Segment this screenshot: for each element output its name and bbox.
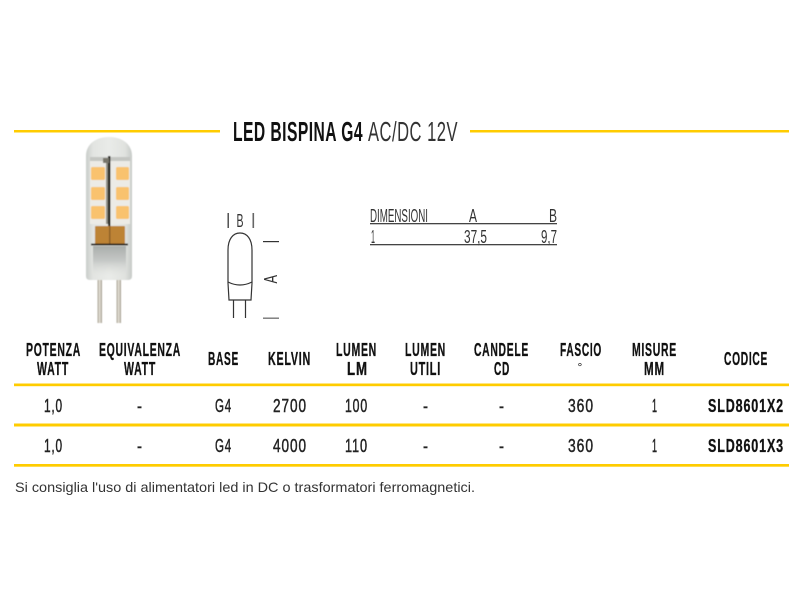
- footnote: Si consiglia l'uso di alimentatori led in DC o trasformatori ferromagnetici.: [15, 479, 475, 495]
- table row 1: 1: [652, 396, 657, 416]
- table header: BASE: [208, 349, 239, 369]
- icon: LED G4 bulb photo: [86, 137, 132, 323]
- table header: POTENZA: [26, 340, 81, 360]
- bulb body: [86, 137, 132, 280]
- table row 1: G4: [215, 396, 232, 416]
- dimensions table: DIMENSIONI: [370, 206, 428, 226]
- table header: LUMEN: [405, 340, 446, 360]
- dimensions table: 37,5: [464, 227, 487, 247]
- table header: WATT: [124, 359, 156, 379]
- dimensions table: B: [549, 206, 557, 226]
- table header: CD: [494, 359, 510, 379]
- table row 2: G4: [215, 436, 232, 456]
- table header: [26, 340, 768, 379]
- table row 1: 1,0: [44, 396, 63, 416]
- table header: FASCIO: [560, 340, 602, 360]
- bulb outline: [228, 233, 252, 318]
- table row 2: -: [137, 436, 142, 456]
- table header: MM: [644, 359, 665, 379]
- dimension A: A: [261, 275, 281, 284]
- bulb capacitor: [91, 226, 128, 246]
- table row 2: -: [499, 436, 504, 456]
- table header: LM: [347, 359, 368, 379]
- dimensions table: 9,7: [541, 227, 557, 247]
- table header: MISURE: [632, 340, 677, 360]
- title rule left: [14, 130, 220, 132]
- table header: UTILI: [410, 359, 441, 379]
- table row 1: -: [137, 396, 142, 416]
- table header: WATT: [37, 359, 69, 379]
- bulb LED chips: [91, 167, 129, 219]
- title: AC/DC 12V: [368, 116, 458, 147]
- table rule 1: [14, 384, 789, 386]
- table row 2: 1,0: [44, 436, 63, 456]
- bulb circuit board: [90, 156, 130, 226]
- table row 1: 100: [345, 396, 368, 416]
- table header: EQUIVALENZA: [99, 340, 181, 360]
- table row 2: 360: [568, 436, 594, 456]
- table header: CANDELE: [474, 340, 529, 360]
- table header: KELVIN: [268, 349, 311, 369]
- table rule 3: [14, 464, 789, 467]
- table row 1: 360: [568, 396, 594, 416]
- dimension drawing: [228, 211, 281, 319]
- table row 2: [44, 436, 784, 456]
- table row 1: -: [499, 396, 504, 416]
- table header: °: [578, 360, 582, 374]
- dimensions table: 1: [371, 227, 375, 247]
- table row 1: -: [423, 396, 428, 416]
- table row 2: 1: [652, 436, 657, 456]
- table rule 2: [14, 424, 789, 426]
- title: LED BISPINA G4: [233, 116, 363, 147]
- dimensions table: [370, 206, 557, 247]
- table row 2: -: [423, 436, 428, 456]
- table row 1: [44, 396, 784, 416]
- label B with ticks: B: [236, 211, 244, 231]
- table header: LUMEN: [336, 340, 377, 360]
- table row 2: 110: [345, 436, 368, 456]
- title rule right: [470, 130, 789, 132]
- table row 2: 4000: [273, 436, 307, 456]
- dimensions table: A: [469, 206, 477, 226]
- table row 1: 2700: [273, 396, 307, 416]
- bulb base shade: [93, 246, 126, 276]
- bulb pins: [98, 275, 121, 323]
- table header: CODICE: [724, 349, 768, 369]
